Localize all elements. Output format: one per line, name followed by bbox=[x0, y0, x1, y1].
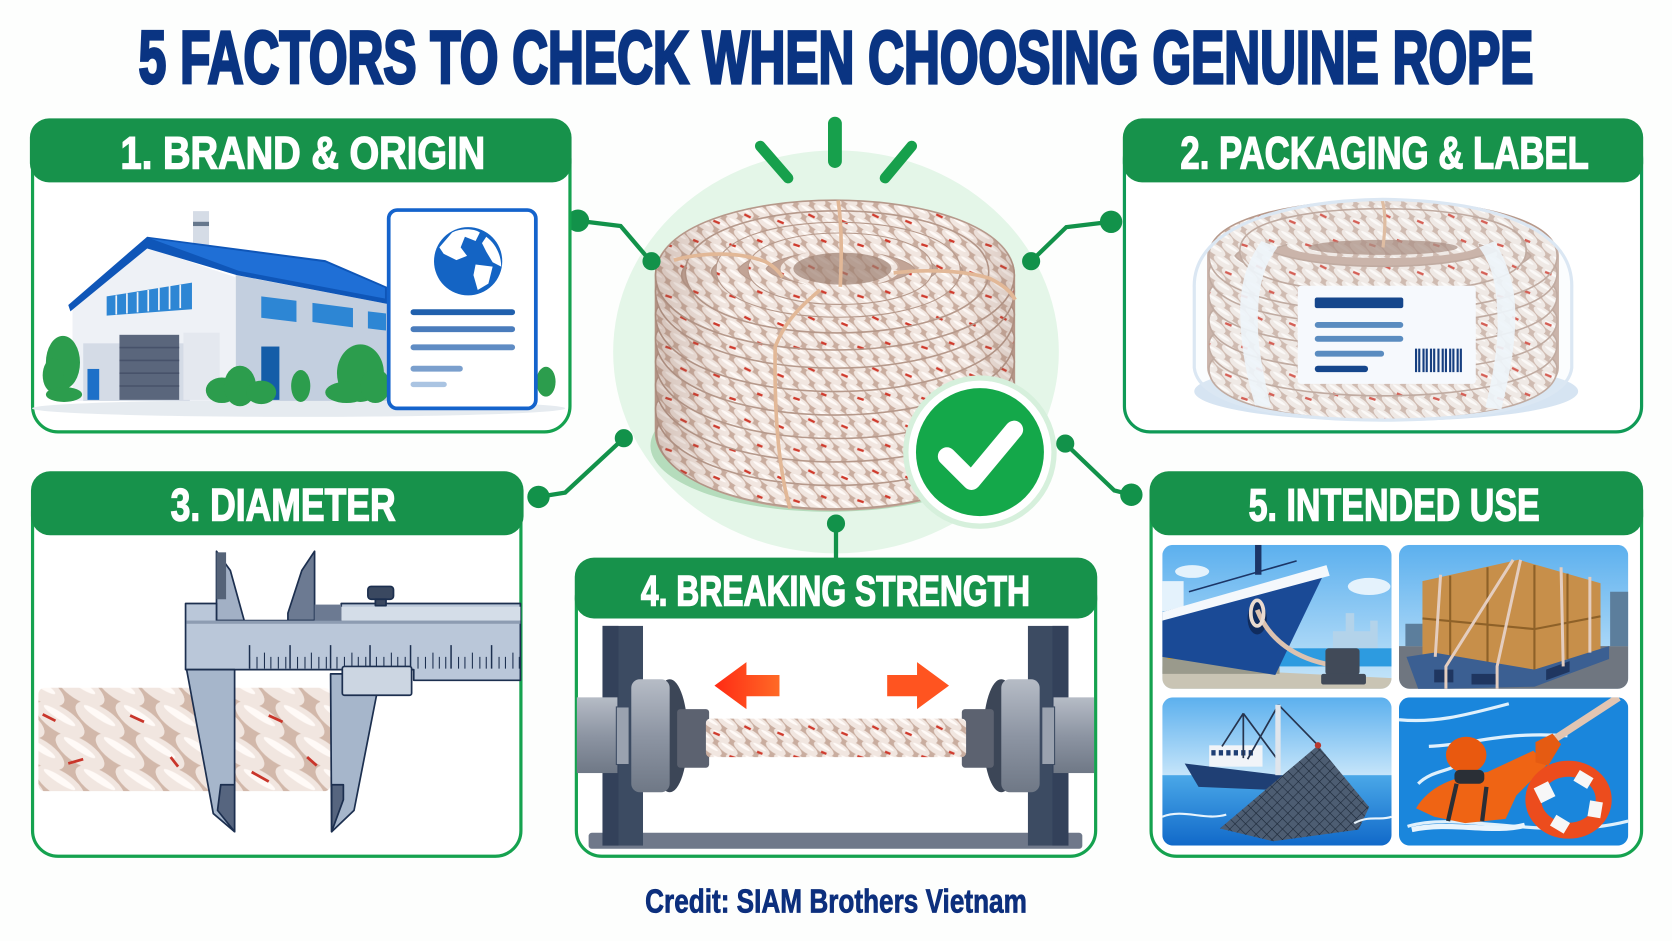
wrapped rope coil bbox=[1194, 199, 1578, 421]
heading: 5. INTENDED USE bbox=[1249, 478, 1540, 530]
emphasis rays bbox=[760, 124, 912, 178]
panel: diameter bbox=[31, 471, 524, 856]
lifebuoy bbox=[1533, 769, 1604, 831]
tile: ship mooring bbox=[1162, 545, 1392, 689]
barcode bbox=[1416, 349, 1461, 372]
credit line: Credit: SIAM Brothers Vietnam bbox=[645, 884, 1027, 921]
heading bbox=[31, 471, 524, 535]
panel: packaging and label bbox=[1123, 118, 1643, 432]
rope segment bbox=[38, 688, 331, 791]
globe icon bbox=[434, 227, 502, 295]
connector 4 bbox=[829, 517, 843, 559]
rope under tension bbox=[706, 719, 966, 757]
central rope coil with glow bbox=[613, 124, 1059, 553]
panel: intended use bbox=[1149, 471, 1643, 856]
glow halo bbox=[613, 150, 1059, 553]
heading bbox=[30, 118, 572, 182]
heading bbox=[1149, 471, 1643, 535]
panel: brand and origin bbox=[30, 118, 572, 432]
factory illustration bbox=[32, 210, 565, 417]
heading bbox=[575, 558, 1097, 618]
scale ticks bbox=[250, 645, 519, 669]
tile: water rescue bbox=[1399, 697, 1628, 846]
panel: breaking strength bbox=[575, 558, 1097, 856]
tile: fishing vessel bbox=[1162, 697, 1392, 846]
lower sliding jaw bbox=[331, 674, 381, 832]
heading bbox=[1123, 118, 1643, 182]
arrow right bbox=[887, 662, 949, 709]
document card bbox=[389, 210, 536, 408]
binding twine bbox=[674, 200, 1015, 509]
connector 1 bbox=[569, 212, 658, 268]
rope coil bbox=[650, 200, 1015, 512]
product label bbox=[1298, 286, 1476, 384]
lock screw bbox=[368, 586, 393, 599]
lower fixed jaw bbox=[187, 670, 235, 832]
heading: 1. BRAND & ORIGIN bbox=[121, 126, 485, 178]
rescuer bbox=[1412, 734, 1561, 830]
right clamp assembly bbox=[962, 626, 1094, 846]
tile: cargo lashing bbox=[1399, 545, 1628, 689]
main beam bbox=[186, 604, 520, 680]
connector 3 bbox=[529, 431, 631, 506]
vernier slider bbox=[342, 666, 412, 695]
test rig base bbox=[589, 833, 1082, 849]
connector 5 bbox=[1058, 437, 1140, 504]
upper jaws bbox=[216, 551, 244, 621]
plastic wrap bbox=[1194, 199, 1572, 420]
straps bbox=[1240, 241, 1277, 407]
heading: 3. DIAMETER bbox=[171, 478, 396, 530]
connector 2 bbox=[1024, 213, 1120, 268]
heading: 4. BREAKING STRENGTH bbox=[641, 568, 1030, 616]
left clamp assembly bbox=[577, 626, 709, 846]
caliper bbox=[186, 551, 520, 832]
check badge bbox=[903, 375, 1057, 529]
trees bbox=[43, 336, 556, 406]
arrow left bbox=[714, 662, 779, 709]
